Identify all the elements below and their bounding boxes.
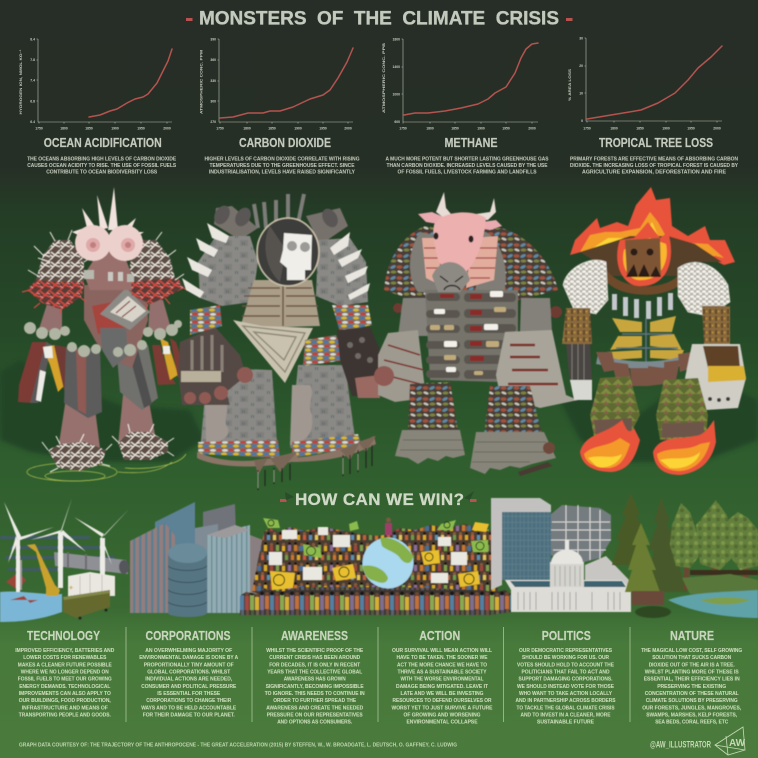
- right hand: [496, 330, 578, 408]
- right upper arm: [520, 298, 552, 332]
- chart: atmospheric carbon dioxide: 1900: [294, 126, 302, 130]
- shrub in front of trunks: [635, 606, 671, 618]
- panel: corporations: CORPORATIONS TO CHANGE THEIR: [146, 698, 231, 704]
- capitol dome: [550, 540, 584, 587]
- light striped tower: [207, 525, 250, 613]
- right coral crown: [130, 232, 188, 310]
- panel: methane: A MUCH MORE POTENT BUT SHORTER LASTING GREENHOUSE GAS: [386, 157, 549, 163]
- panel: action: LATE AND WE WILL BE INVESTING: [400, 691, 484, 697]
- leafy tree one: [670, 503, 700, 568]
- chart: atmospheric carbon dioxide: 300: [210, 100, 216, 104]
- chart: hydrogen ion concentration: 6.8: [30, 100, 35, 104]
- panel: nature: SOLUTION THAT SUCKS CARBON: [652, 655, 731, 661]
- monster: methane livestock creature: [374, 192, 578, 476]
- chart: atmospheric methane: 1800: [426, 126, 434, 130]
- chart: percentage area loss: 1900: [662, 126, 670, 130]
- scene: crowd of protesters: [240, 518, 511, 615]
- panel: corporations: GLOBAL CORPORATIONS. WHILST: [147, 670, 231, 676]
- scene: technology: [0, 498, 129, 622]
- panel: nature: NATURE: [670, 629, 714, 643]
- wind turbines: [4, 498, 129, 592]
- oil rig base: [197, 436, 376, 490]
- left hand: [178, 327, 253, 405]
- panel: corporations: [139, 629, 238, 718]
- chart: atmospheric methane: 1400: [392, 65, 400, 69]
- panel: nature: THE MAGICAL LOW COST, SELF GROWING: [641, 648, 742, 654]
- plant legs: [590, 376, 708, 440]
- panel: politics: POLITICIANS THAT FAIL TO ACT AND: [522, 670, 610, 676]
- chart: hydrogen ion concentration: 1850: [85, 126, 93, 130]
- grey left neck armour: [410, 232, 438, 292]
- leafy tree three: [728, 512, 758, 570]
- left car band: [190, 305, 222, 335]
- panel: awareness: TO IGNORE. THIS NEEDS TO CONTINUE IN: [265, 691, 365, 697]
- panel: technology: WHERE WE NO LONGER DEPEND ON: [21, 670, 109, 676]
- golden torso diamonds: [606, 316, 684, 360]
- left foot coral: [42, 434, 112, 472]
- chart: atmospheric methane: [382, 38, 538, 130]
- panel: politics: TO TACKLE THE GLOBAL CLIMATE CRISIS: [516, 705, 615, 711]
- grey kilt strips: [64, 345, 158, 418]
- panel: nature: CONCENTRATION OF THESE NATURAL: [645, 691, 739, 697]
- panel: action: [392, 629, 493, 726]
- rear conifer: [612, 493, 652, 565]
- yellow crane: [27, 544, 60, 596]
- left coral crown: [22, 230, 90, 314]
- central column: [100, 328, 128, 368]
- helmet: [257, 218, 319, 286]
- chart: percentage area loss: 30: [579, 36, 583, 40]
- livestock trays: [426, 291, 516, 379]
- grey right neck armour: [476, 232, 506, 292]
- panel: action: THRIVE AS A SUSTAINABLE SOCIETY: [398, 670, 487, 676]
- panel: tropical tree loss: [568, 36, 739, 176]
- chart: atmospheric carbon dioxide: 270: [210, 120, 216, 124]
- chart: percentage area loss: 0: [581, 119, 583, 123]
- upper crowd: [252, 524, 498, 600]
- panel: technology: INFRASTRUCTURE AND MEANS OF: [22, 705, 108, 711]
- head flame ring: [617, 222, 671, 286]
- panel: politics: VOTES SHOULD HOLD TO ACCOUNT THE: [517, 662, 614, 668]
- chart: atmospheric carbon dioxide: 330: [210, 79, 216, 83]
- rear grey tower: [203, 504, 236, 535]
- panel: corporations: PROPORTIONALLY TINY AMOUNT OF: [144, 662, 234, 668]
- left leg towers: [200, 368, 277, 452]
- panel: ocean acidification: CONTRIBUTE TO OCEAN BIODIVERSITY LOSS: [46, 170, 158, 176]
- chart: percentage area loss: 1850: [636, 126, 644, 130]
- leafy tree two: [696, 500, 734, 570]
- globe: [362, 538, 414, 588]
- panel: awareness: WHILST THE SCIENTIFIC PROOF OF THE: [266, 648, 364, 654]
- white batteries: +: [69, 585, 73, 592]
- chart: atmospheric methane: 1750: [399, 126, 407, 130]
- legs: [58, 385, 156, 450]
- right hand: [337, 327, 380, 398]
- chart: percentage area loss: 2000: [713, 126, 721, 130]
- left upper arm: [398, 298, 430, 336]
- chart: percentage area loss: 1750: [583, 126, 591, 130]
- monster: tropical tree loss fire creature: [562, 187, 746, 475]
- panel: ocean acidification: OCEAN ACIDIFICATION: [44, 136, 162, 150]
- panel: methane: METHANE: [444, 136, 498, 150]
- upper arms: [38, 304, 62, 332]
- right sleeve: [152, 338, 186, 385]
- panel: awareness: [265, 629, 365, 726]
- torso: [425, 290, 518, 382]
- exhaust fan: [254, 194, 304, 228]
- chart: atmospheric methane: 1850: [451, 126, 459, 130]
- chart: atmospheric carbon dioxide: 1750: [216, 126, 224, 130]
- stone boots: [395, 430, 556, 476]
- right foot coral: [112, 424, 174, 460]
- shoulder knobs: [24, 320, 182, 357]
- panel: corporations: AN OVERWHELMING MAJORITY OF: [145, 648, 232, 654]
- panel: technology: MAKES A CLEANER FUTURE POSSIBLE: [18, 662, 112, 668]
- panel: technology: [15, 629, 115, 718]
- tall white tower: [491, 498, 551, 590]
- left hand: [374, 330, 426, 402]
- right upper arm: [148, 300, 172, 332]
- right car band: [332, 305, 372, 332]
- panel: politics: WE SHOULD INSTEAD VOTE FOR THOSE: [517, 684, 614, 690]
- panel: ocean acidification: THE OCEANS ABSORBING HIGH LEVELS OF CARBON DIOXIDE: [27, 157, 177, 163]
- rear grey annex: [195, 524, 218, 560]
- monster: ocean acidification coral creature: [18, 187, 188, 481]
- chart: atmospheric methane: 2000: [528, 126, 536, 130]
- water: [0, 592, 62, 622]
- panel: technology: LOWER COSTS FOR RENEWABLES: [23, 655, 107, 661]
- cow head: [418, 192, 502, 276]
- chart: percentage area loss: [568, 36, 722, 130]
- panel: nature: [641, 629, 742, 726]
- background hills and shadows: [0, 360, 758, 462]
- panel: corporations: CONSUMER AND POLITICAL PRESSURE: [141, 684, 237, 690]
- panel: carbon dioxide: CARBON DIOXIDE: [239, 136, 331, 150]
- panel: politics: AND IN PARTNERSHIP ACROSS BORDERS: [516, 698, 616, 704]
- panel: politics: WHO WANT TO TAKE ACTION LOCALLY: [519, 691, 612, 697]
- chart: percentage area loss: 1800: [610, 126, 618, 130]
- heading: how can we win: HOW CAN WE WIN?: [295, 490, 464, 509]
- grey pipeline: [54, 552, 129, 574]
- torso spine: [616, 318, 678, 362]
- chart: hydrogen ion concentration: 2000: [163, 126, 171, 130]
- panel: action: OUR SURVIVAL WILL MEAN ACTION WILL: [392, 648, 493, 654]
- panel: awareness: ORDER TO FURTHER SPREAD THE: [273, 698, 357, 704]
- left sleeve: [18, 342, 74, 403]
- dark soil shoulders: [580, 236, 722, 276]
- left sheep shoulder: [563, 260, 608, 314]
- chart: hydrogen ion concentration: 1900: [111, 126, 119, 130]
- panel: corporations: FOR THEIR DAMAGE TO OUR PLANET.: [143, 712, 235, 718]
- chart: hydrogen ion concentration: 7.8: [30, 58, 35, 62]
- chart: hydrogen ion concentration: 6.4: [30, 120, 35, 124]
- panel: technology: OUR BUILDINGS, FOOD PRODUCTION,: [19, 698, 111, 704]
- tall conifer: [645, 497, 688, 592]
- chart: hydrogen ion concentration: 7.4: [30, 78, 35, 82]
- panel: technology: TRANSPORTING PEOPLE AND GOODS.: [19, 712, 111, 718]
- bark collar: [604, 268, 684, 295]
- chart: percentage area loss: 10: [579, 92, 583, 96]
- tower roof: [207, 525, 250, 538]
- footer: illustrator handle: @AW_ILLUSTRATOR: [650, 740, 711, 750]
- panel: politics: POLITICS: [542, 629, 591, 643]
- panel: tropical tree loss: AGRICULTURE EXPANSION, DEFORESTATION AND FIRE: [582, 170, 727, 176]
- panel: nature: SEA BEDS, CORAL REEFS, ETC: [655, 720, 728, 726]
- chart: atmospheric carbon dioxide: ATMOSPHERIC CONC. PPM: [200, 50, 204, 114]
- panel: politics: SUPPORT DAMAGING CORPORATIONS.: [518, 677, 613, 683]
- panel: technology: IMPROVEMENTS CAN ALSO APPLY TO: [19, 691, 111, 697]
- parliament rotunda: [550, 505, 611, 563]
- panel: awareness: PRESSURE ON OUR REPRESENTATIVES: [267, 712, 363, 718]
- lower car band: [303, 335, 346, 366]
- body: [84, 285, 148, 368]
- front conifer: [625, 523, 660, 592]
- panel: technology: TECHNOLOGY: [27, 629, 101, 643]
- left foot flame: [580, 420, 640, 472]
- chart: percentage area loss: 20: [579, 64, 583, 68]
- panel: carbon dioxide: INDUSTRIALISATION, LEVELS HAVE RAISED SIGNIFICANTLY: [209, 170, 356, 176]
- green banners: [263, 518, 488, 558]
- panel: politics: AND TO INVEST IN A CLEANER, MORE: [520, 712, 611, 718]
- ankle rocks: [594, 418, 704, 438]
- panel: carbon dioxide: TEMPERATURES DUE TO THE GREENHOUSE EFFECT. SINCE: [210, 163, 355, 169]
- pond: [668, 590, 758, 618]
- footer: graph data credit: GRAPH DATA COURTESY OF: THE TRAJECTORY OF THE ANTHROPOCENE - THE GREAT ACCELERATION (2015) BY STEFFEN, W., W. BROADGATE, L. DEUTSCH, O. GAFFNEY, C. LUDWIG: [19, 743, 457, 749]
- panel: awareness: AWARENESS: [281, 629, 348, 643]
- panel: ocean acidification: CAUSES OCEAN ACIDITY TO RISE. THE USE OF FOSSIL FUELS: [27, 163, 177, 169]
- pond bank: [700, 597, 750, 604]
- chart: atmospheric methane: 1950: [502, 126, 510, 130]
- right arm: [685, 306, 746, 410]
- panel: politics: SHOULD BE WORKING FOR US. OUR: [522, 655, 609, 661]
- chart: atmospheric methane: 1900: [477, 126, 485, 130]
- chart: hydrogen ion concentration: 1800: [60, 126, 68, 130]
- rock skirt: [596, 352, 692, 386]
- title: MONSTERS OF THE CLIMATE CRISIS: [199, 8, 559, 30]
- flaming crown: [570, 187, 735, 265]
- left chimneys: [211, 203, 258, 240]
- panel: action: WITH THE WORSE ENVIRONMENTAL: [400, 677, 484, 683]
- panel: politics: [516, 629, 616, 726]
- panel: technology: ENERGY DEMANDS. TECHNOLOGICAL: [19, 684, 111, 690]
- panel: action: WORST YET TO JUST SURVIVE A FUTURE: [392, 705, 493, 711]
- panel: nature: CLIMATE SOLUTIONS BY PRESERVING: [646, 698, 738, 704]
- chart: atmospheric carbon dioxide: 2000: [344, 126, 352, 130]
- chart: hydrogen ion concentration: HYDROGEN ION, NMOL KG⁻¹: [19, 49, 23, 114]
- dark woodland band: [690, 570, 758, 575]
- panel: carbon dioxide: HIGHER LEVELS OF CARBON DIOXIDE CORRELATE WITH RISING: [204, 157, 360, 163]
- pink striped tower: [130, 523, 175, 613]
- panel: ocean acidification: [19, 38, 177, 176]
- chart: percentage area loss: 1950: [687, 126, 695, 130]
- panel: awareness: SIGNIFICANTLY, BECOMING IMPOSSIBLE: [266, 684, 364, 690]
- icon: illustrator logo: [715, 727, 746, 755]
- trunk face: [84, 250, 134, 290]
- panel: politics: SUSTAINABLE FUTURE: [537, 720, 595, 726]
- turbine under water: [6, 560, 38, 603]
- chart: percentage area loss: % AREA LOSS: [568, 68, 572, 101]
- spiked head: [72, 187, 144, 261]
- panel: nature: SWAMPS, MARSHES, KELP FORESTS,: [646, 712, 738, 718]
- left shoulder towers: [198, 236, 258, 306]
- mottled shoulders: [384, 226, 558, 300]
- panel: methane: THAN CARBON DIOXIDE. INCREASED LEVELS CAUSED BY THE USE: [386, 163, 548, 169]
- pillars collar: [612, 293, 673, 319]
- person on globe: [385, 518, 392, 535]
- right foot flame: [653, 420, 716, 475]
- panel: action: ENVIRONMENTAL COLLAPSE: [406, 720, 478, 726]
- scene: politics buildings: [491, 498, 631, 612]
- monster: carbon dioxide pollution creature: [178, 194, 380, 490]
- panel: methane: OF FOSSIL FUELS, LIVESTOCK FARMING AND LANDFILLS: [398, 170, 537, 176]
- right chimneys: [306, 206, 348, 245]
- panel: awareness: FOR DECADES, IT IS ONLY IN RECENT: [269, 662, 361, 668]
- red chest plates: [92, 300, 126, 334]
- chart: atmospheric methane: 600: [394, 120, 400, 124]
- panel: tropical tree loss: TROPICAL TREE LOSS: [599, 136, 713, 150]
- chart: hydrogen ion concentration: 1750: [35, 126, 43, 130]
- panel: awareness: AWARENESS HAS GROWN: [284, 677, 346, 683]
- panel: action: DAMAGE BEING MITIGATED. LEAVE IT: [396, 684, 489, 690]
- panel: tropical tree loss: PRIMARY FORESTS ARE EFFECTIVE MEANS OF ABSORBING CARBON: [570, 157, 738, 163]
- panel: nature: WHILST PLANTING MORE OF THESE IS: [645, 670, 739, 676]
- arm discs: [393, 303, 562, 318]
- scene: corporations skyscrapers: [130, 502, 263, 617]
- panel: action: RESOURCES TO DEFEND OURSELVES OR: [392, 698, 492, 704]
- chart: hydrogen ion concentration: [19, 38, 172, 130]
- cars at feet: [198, 434, 362, 458]
- panel: action: ACT THE MORE CHANCE WE HAVE TO: [397, 662, 487, 668]
- panel: corporations: WAYS AND TO BE HELD ACCOUNTABLE: [141, 705, 237, 711]
- right sheep shoulder: [678, 262, 730, 316]
- chart: atmospheric carbon dioxide: 390: [210, 38, 216, 42]
- rib cage: [240, 280, 320, 328]
- panel: nature: PRESERVING THE EXISTING: [657, 684, 726, 690]
- panel: politics: OUR DEMOCRATIC REPRESENTATIVES: [519, 648, 613, 654]
- panel: corporations: CORPORATIONS: [146, 629, 230, 643]
- side tower: [250, 535, 263, 600]
- panel: awareness: YEARS THAT THE COLLECTIVE GLOBAL: [267, 670, 363, 676]
- scene: nature: [612, 493, 758, 618]
- glass facade: [502, 512, 551, 580]
- leafy tree trunks: [684, 550, 749, 590]
- conifer trunks: [632, 591, 664, 605]
- panel: technology: FOSSIL FUELS TO MEET OUR GROWING: [18, 677, 112, 683]
- left arm: [562, 308, 592, 400]
- capitol base: [505, 580, 631, 612]
- chart: atmospheric methane: 1000: [392, 92, 400, 96]
- placards: [269, 527, 467, 583]
- panel: tropical tree loss: DIOXIDE. THE INCREASING LOSS OF TROPICAL FOREST IS CAUSED BY: [570, 163, 739, 169]
- cylinder tower: [168, 543, 207, 617]
- panel: awareness: AWARENESS AND CREATE THE NEEDED: [266, 705, 363, 711]
- green battery container: [63, 590, 110, 620]
- right leg towers: [290, 365, 356, 448]
- chart: atmospheric carbon dioxide: 1950: [319, 126, 327, 130]
- dark solar strips: [0, 536, 115, 571]
- tree stump head: [625, 238, 661, 277]
- panel: nature: OUR FORESTS, JUNGLES, MANGROVES,: [642, 705, 742, 711]
- panel: corporations: INDIVIDUAL ACTIONS ARE NEEDED,: [145, 677, 233, 683]
- grey sloped wing: [585, 556, 631, 590]
- icon: illustrator logo: AW: [729, 738, 746, 749]
- water ripples: [27, 454, 186, 481]
- chart: atmospheric carbon dioxide: 1850: [268, 126, 276, 130]
- white missiles: [182, 223, 370, 300]
- right shoulder towers: [316, 238, 368, 306]
- chart: atmospheric carbon dioxide: 1800: [243, 126, 251, 130]
- chart: atmospheric carbon dioxide: 360: [210, 58, 216, 62]
- lower crowd: [240, 587, 511, 615]
- panel: technology: IMPROVED EFFICIENCY, BATTERIES AND: [15, 648, 115, 654]
- chart: atmospheric methane: 1800: [392, 38, 400, 42]
- stone snout mask: [432, 262, 470, 292]
- panel: corporations: ENVIRONMENTAL DAMAGE IS DONE BY A: [139, 655, 238, 661]
- panel: nature: ESSENTIAL, THEIR EFFICIENCY LIES IN: [644, 677, 740, 683]
- yellow banners: [270, 522, 489, 590]
- concentric triangle chest plate: [233, 320, 313, 383]
- inner head flame: [623, 238, 667, 280]
- bacon mane: [422, 236, 498, 288]
- chart: hydrogen ion concentration: 8.4: [30, 38, 35, 42]
- chart: atmospheric carbon dioxide: [200, 38, 353, 130]
- panel: carbon dioxide: [200, 38, 360, 176]
- panel: methane: [382, 38, 549, 176]
- panel: nature: DIOXIDE OUT OF THE AIR IS A TREE.: [649, 662, 735, 668]
- panel: action: ACTION: [419, 629, 460, 643]
- panel: action: OF GROWING AND WORSENING: [404, 712, 480, 718]
- shrubs: [682, 574, 758, 596]
- chart: hydrogen ion concentration: 1950: [137, 126, 145, 130]
- panel: awareness: CURRENT CRISIS HAS BEEN AROUND: [269, 655, 360, 661]
- grey gun arm: [100, 288, 150, 330]
- panel: action: HAVE TO BE TAKEN. THE SOONER WE: [396, 655, 488, 661]
- extinction symbols: [268, 520, 484, 586]
- panel: corporations: IS ESSENTIAL FOR THESE: [157, 691, 221, 697]
- panel: awareness: AND OPTIONS AS CONSUMERS.: [277, 720, 353, 726]
- mottled legs: [408, 382, 542, 434]
- chart: atmospheric methane: ATMOSPHERIC CONC. PPB: [382, 43, 386, 113]
- blue-grey belt: [596, 354, 690, 368]
